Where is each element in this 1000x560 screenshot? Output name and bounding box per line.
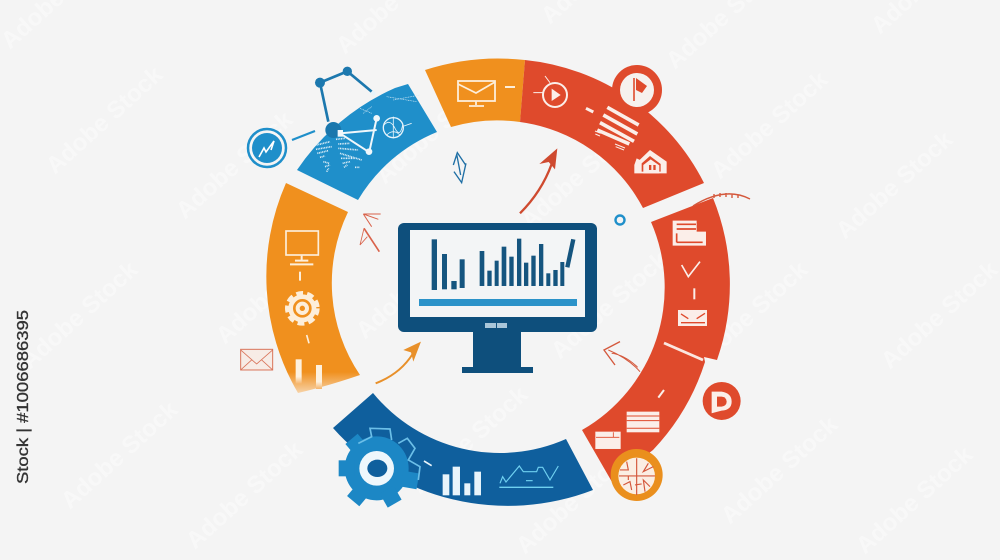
icon: double arrow — [453, 153, 466, 183]
arrow: top red — [520, 148, 557, 213]
monitor stand — [462, 330, 533, 373]
icon: small ring — [616, 216, 624, 224]
watermark pattern: Adobe Stock — [511, 441, 639, 559]
watermark pattern: Adobe Stock — [41, 61, 169, 179]
icon: orange gear — [287, 293, 317, 343]
side stock id label: Stock | #1006686395 — [15, 310, 32, 484]
icon: network nodes — [315, 67, 380, 155]
watermark pattern: Adobe Stock — [716, 411, 844, 529]
watermark pattern: Adobe Stock — [851, 441, 979, 559]
icon: small envelope — [241, 349, 273, 370]
segment: top orange — [425, 59, 525, 127]
watermark pattern: Adobe Stock — [16, 256, 144, 374]
watermark pattern: Adobe Stock — [351, 226, 479, 344]
icon: gear — [339, 428, 420, 508]
watermark pattern: Adobe Stock — [211, 231, 339, 349]
watermark pattern: Adobe Stock — [406, 381, 534, 499]
icon: stack list and folder — [595, 390, 664, 449]
icon: thin curve — [693, 193, 750, 206]
segment: top-left blue — [297, 67, 437, 200]
arrow: left orange — [376, 342, 421, 383]
segment: right red — [582, 193, 750, 482]
divider line — [664, 343, 703, 360]
segment: left orange — [266, 183, 360, 393]
screen progress bar — [419, 299, 577, 306]
icon: house — [634, 150, 667, 173]
icon: list — [586, 107, 639, 150]
screen bar chart — [432, 239, 573, 290]
watermark pattern: Adobe Stock — [371, 71, 499, 189]
segment: bottom navy — [333, 393, 593, 508]
segment: top right red — [520, 60, 704, 208]
monitor buttons — [485, 323, 507, 328]
icon: flag badge — [612, 65, 662, 115]
arrow: left thin red — [360, 214, 381, 252]
icon: D speech badge — [703, 382, 741, 420]
dash — [505, 86, 515, 88]
watermark pattern: Adobe Stock — [56, 396, 184, 514]
monitor — [398, 223, 597, 373]
icon: monitor — [286, 231, 318, 281]
monitor body — [398, 223, 597, 332]
icon: envelope — [678, 310, 707, 326]
icon: bar chart — [424, 461, 481, 495]
watermark pattern: Adobe Stock — [706, 66, 834, 184]
icon: globe — [383, 117, 412, 138]
icon: check mark — [682, 262, 700, 299]
watermark pattern: Adobe Stock — [546, 246, 674, 364]
icon: faded bars — [296, 359, 322, 389]
icon: brain badge — [611, 449, 663, 501]
icon: line chart — [499, 466, 558, 487]
icon: document — [673, 221, 706, 246]
arrow: right red — [604, 342, 640, 372]
icon: play button — [533, 76, 567, 107]
watermark pattern: Adobe Stock — [181, 436, 309, 554]
icon: pulse badge — [248, 129, 315, 167]
icon: world map — [316, 95, 420, 172]
watermark pattern: Adobe Stock — [831, 126, 959, 244]
watermark pattern: Adobe Stock — [171, 106, 299, 224]
watermark pattern: Adobe Stock — [686, 256, 814, 374]
watermark pattern: Adobe Stock — [516, 116, 644, 234]
icon: envelope monitor — [458, 81, 495, 106]
monitor screen — [410, 230, 585, 317]
watermark pattern: Adobe Stock — [876, 256, 1000, 374]
